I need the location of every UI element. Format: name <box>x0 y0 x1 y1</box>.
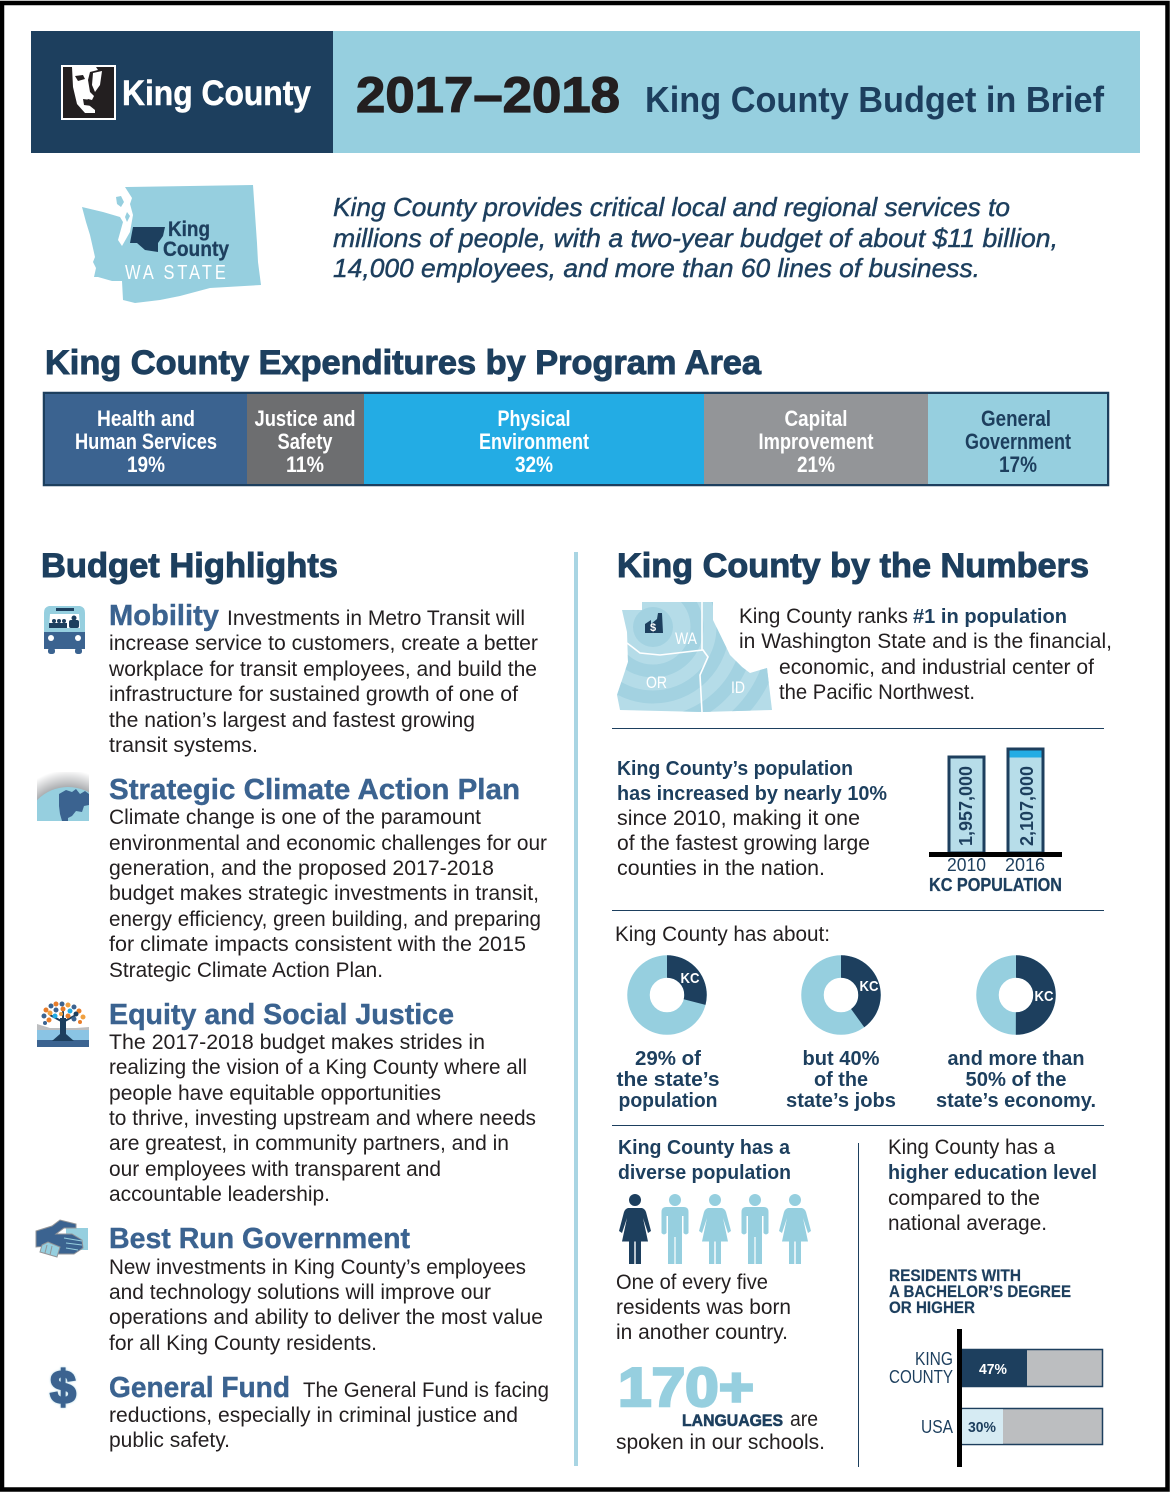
body text: budget makes strategic investments in transit, <box>109 882 539 905</box>
panel: mobility <box>44 600 538 757</box>
icon: handshake <box>36 1220 88 1257</box>
education bar chart <box>889 1329 1102 1467</box>
body text: operations and ability to deliver the most value <box>109 1306 543 1329</box>
icon: bus <box>44 606 85 654</box>
chart title: RESIDENTS WITH <box>889 1267 1021 1285</box>
segment: capital improvement: Improvement <box>758 429 874 454</box>
body text <box>109 1379 549 1452</box>
body text <box>109 806 547 982</box>
ranking text: the Pacific Northwest. <box>779 681 975 704</box>
education text: national average. <box>888 1212 1047 1235</box>
panel: regional map and ranking <box>617 602 1110 712</box>
intro text: 14,000 employees, and more than 60 lines of business. <box>333 253 980 283</box>
bar: 2016: 2,107,000 <box>1017 766 1037 846</box>
bar: 2010: 2010 <box>947 855 986 875</box>
foreign-born text: in another country. <box>616 1321 788 1344</box>
ranking text: #1 in population <box>913 605 1067 628</box>
regional map: ID <box>731 679 745 697</box>
languages text: are <box>790 1408 818 1431</box>
islands <box>116 196 130 222</box>
diversity heading: King County has a <box>618 1136 791 1159</box>
languages text: spoken in our schools. <box>616 1431 825 1454</box>
languages text: LANGUAGES <box>682 1411 783 1430</box>
donut: 29 percent <box>616 966 720 1112</box>
intro text: King County provides critical local and regional services to <box>333 192 1010 222</box>
lead-in text: King County has about: <box>615 923 830 946</box>
bar: King County 47 percent <box>889 1349 1102 1387</box>
body text: infrastructure for sustained growth of one of <box>109 683 518 706</box>
education text: King County has a <box>888 1136 1055 1159</box>
donut: 50 percent: state’s economy. <box>936 1090 1096 1112</box>
body text: Investments in Metro Transit will <box>227 607 525 630</box>
intro text <box>333 192 1058 283</box>
diversity heading: diverse population <box>618 1161 791 1184</box>
donut: 40 percent: KC <box>860 978 879 995</box>
bar: 2010: 1,957,000 <box>956 766 976 846</box>
segment: general government: Government <box>965 429 1072 454</box>
segment: health and human services: Human Services <box>75 429 217 454</box>
bar: USA 30 percent: 30% <box>968 1419 996 1436</box>
segment: physical environment: 32% <box>515 452 553 477</box>
body text <box>109 1256 543 1355</box>
segment: health and human services: 19% <box>127 452 165 477</box>
Washington state locator map: WA STATE <box>125 260 226 283</box>
Washington state locator map <box>82 185 261 303</box>
chart title: OR HIGHER <box>889 1299 975 1317</box>
population text: of the fastest growing large <box>617 832 870 855</box>
population bar chart <box>929 749 1062 895</box>
heading: expenditures: King County Expenditures by Program Area <box>45 344 762 382</box>
donut: 40 percent <box>786 966 896 1112</box>
panel: share of state <box>615 923 1096 1112</box>
bar: USA 30 percent: USA <box>921 1417 953 1437</box>
population text <box>617 757 887 880</box>
donut: 40 percent: but 40% <box>802 1048 880 1070</box>
body text: The General Fund is facing <box>303 1379 549 1402</box>
body text: realizing the vision of a King County where all <box>109 1056 527 1079</box>
body text: our employees with transparent and <box>109 1158 441 1181</box>
title: King County Budget in Brief <box>645 79 1105 120</box>
body text: New investments in King County’s employees <box>109 1256 526 1279</box>
body text: generation, and the proposed 2017-2018 <box>109 857 494 880</box>
heading: Mobility <box>109 600 219 632</box>
heading: by the numbers: King County by the Numbers <box>617 547 1089 585</box>
population text: King County’s population <box>617 757 853 780</box>
header banner <box>31 31 1140 153</box>
population text: has increased by nearly 10% <box>617 782 887 805</box>
population text: counties in the nation. <box>617 857 825 880</box>
segment: physical environment <box>364 394 704 484</box>
body text: energy efficiency, green building, and preparing <box>109 908 541 931</box>
panel: population growth <box>617 749 1062 895</box>
segment: justice and safety <box>247 394 364 484</box>
chart title <box>889 1267 1071 1317</box>
heading: Equity and Social Justice <box>109 999 454 1031</box>
body text: and technology solutions will improve our <box>109 1281 491 1304</box>
ranking text: in Washington State and is the financial, <box>739 630 1112 653</box>
King County logo: King County <box>122 74 311 113</box>
donut: 50 percent: KC <box>1034 988 1054 1005</box>
regional map <box>617 602 772 712</box>
education text <box>888 1136 1097 1235</box>
body text: to thrive, investing upstream and where needs <box>109 1107 536 1130</box>
segment: capital improvement: Capital <box>784 406 848 431</box>
body text: workplace for transit employees, and build the <box>108 658 537 681</box>
segment: justice and safety: 11% <box>286 452 324 477</box>
bar: 2016: 2016 <box>1005 855 1045 875</box>
body text: accountable leadership. <box>109 1183 330 1206</box>
education text: compared to the <box>888 1187 1040 1210</box>
panel: best run government <box>36 1220 543 1355</box>
column divider <box>574 552 578 1466</box>
pictogram: one of five people <box>619 1194 811 1264</box>
segment: physical environment: Physical <box>498 406 570 431</box>
donut: 50 percent: 50% of the <box>966 1069 1066 1091</box>
bar: USA 30 percent <box>921 1408 1102 1444</box>
segment: health and human services <box>45 394 247 484</box>
regional map: WA <box>675 630 697 648</box>
heading: Best Run Government <box>109 1223 410 1255</box>
title year: 2017–2018 <box>356 67 620 123</box>
big number: 170+: 170+ <box>618 1356 754 1418</box>
chart label: KC POPULATION <box>929 875 1062 895</box>
Washington state locator map: King <box>168 218 210 241</box>
body text: Climate change is one of the paramount <box>109 806 481 829</box>
icon: tree <box>37 1002 89 1047</box>
King County shape <box>130 227 165 252</box>
regional map: OR <box>646 674 667 692</box>
donut: 29 percent: KC <box>680 970 700 987</box>
body text: the nation’s largest and fastest growing <box>109 709 475 732</box>
foreign-born text <box>616 1271 791 1344</box>
body text: increase service to customers, create a better <box>109 632 538 655</box>
segment: capital improvement: 21% <box>797 452 835 477</box>
foreign-born text: One of every five <box>616 1271 768 1294</box>
bar: 2016 <box>1005 749 1045 875</box>
diversity heading <box>618 1136 791 1184</box>
Washington state locator map: County <box>163 238 229 261</box>
heading: budget highlights: Budget Highlights <box>41 547 338 585</box>
body text: environmental and economic challenges for our <box>109 832 547 855</box>
donut: 50 percent <box>936 966 1096 1112</box>
body text: transit systems. <box>109 734 258 757</box>
donut: 40 percent: state’s jobs <box>786 1090 896 1112</box>
factory marker <box>645 613 663 633</box>
segment: general government: General <box>981 406 1051 431</box>
languages text <box>616 1408 825 1454</box>
donut: 29 percent: population <box>618 1090 718 1112</box>
bar: 2010 <box>947 757 986 875</box>
segment: health and human services: Health and <box>97 406 195 431</box>
King County logo <box>62 66 311 119</box>
donut: 29 percent: the state’s <box>616 1069 720 1091</box>
foreign-born text: residents was born <box>616 1296 791 1319</box>
segment: justice and safety: Safety <box>278 429 333 454</box>
expenditures stacked bar <box>44 393 1108 485</box>
panel: equity and social justice <box>37 999 536 1206</box>
segment: general government <box>928 394 1107 484</box>
body text: for climate impacts consistent with the 2015 <box>109 933 526 956</box>
ranking text: King County ranks <box>739 605 908 628</box>
population text: since 2010, making it one <box>617 807 860 830</box>
regional map: $ <box>650 622 656 634</box>
bar: King County 47 percent: COUNTY <box>889 1367 953 1387</box>
donut: 29 percent: 29% of <box>635 1048 701 1070</box>
panel: education <box>888 1136 1102 1467</box>
education text: higher education level <box>888 1161 1097 1184</box>
ranking text <box>739 605 1112 704</box>
icon: globe <box>37 772 89 821</box>
body text: people have equitable opportunities <box>109 1082 441 1105</box>
ranking text: economic, and industrial center of <box>779 656 1094 679</box>
bar: King County 47 percent: KING <box>915 1349 953 1369</box>
icon: dollar sign: $ <box>50 1361 76 1413</box>
body text: The 2017-2018 budget makes strides in <box>109 1031 485 1054</box>
body text: are greatest, in community partners, and in <box>109 1132 509 1155</box>
body text <box>108 607 538 757</box>
panel: diversity <box>616 1136 825 1454</box>
body text: reductions, especially in criminal justice and <box>109 1404 518 1427</box>
body text: Strategic Climate Action Plan. <box>109 959 383 982</box>
panel: strategic climate action plan <box>8 770 547 982</box>
bar: King County 47 percent: 47% <box>979 1361 1007 1378</box>
donut: 50 percent: and more than <box>948 1048 1084 1070</box>
segment: general government: 17% <box>999 452 1037 477</box>
body text: public safety. <box>109 1429 230 1452</box>
body text <box>109 1031 536 1206</box>
heading: General Fund <box>109 1372 290 1404</box>
chart title: A BACHELOR’S DEGREE <box>889 1283 1071 1301</box>
donut: 40 percent: of the <box>814 1069 868 1091</box>
panel: general fund <box>50 1361 549 1452</box>
segment: justice and safety: Justice and <box>254 406 356 431</box>
heading: Strategic Climate Action Plan <box>109 774 520 806</box>
segment: capital improvement <box>704 394 928 484</box>
body text: for all King County residents. <box>109 1332 377 1355</box>
intro text: millions of people, with a two-year budget of about $11 billion, <box>333 223 1058 253</box>
segment: physical environment: Environment <box>479 429 590 454</box>
